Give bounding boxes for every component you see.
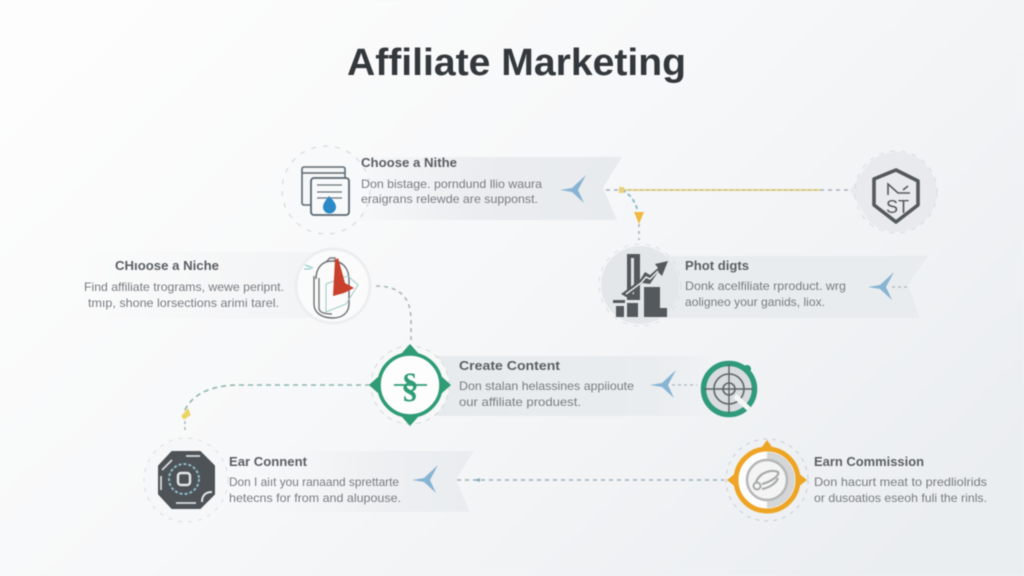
ribbon xyxy=(340,157,622,220)
panel: earn commission xyxy=(726,439,987,521)
arrow xyxy=(412,465,438,493)
panel: phot digts: aoligneo your ganids, liox. xyxy=(685,295,825,309)
icon: dark gear xyxy=(144,438,228,522)
panel: ear connent xyxy=(144,438,480,522)
heading: Earn Commission xyxy=(814,454,924,469)
icon: dollar compass: § xyxy=(401,366,419,405)
panel: create content: our affiliate produest. xyxy=(459,395,581,409)
panel: choose a niche left: tmıp, shone lorsections arimi tarel. xyxy=(88,296,279,310)
body: Don stalan helassines appiioute xyxy=(459,379,634,393)
heading: Create Content xyxy=(459,358,561,373)
heading: CHıoose a Niche xyxy=(115,258,219,273)
panel: choose a niche top: eraigrans relewde are supponst. xyxy=(361,192,538,206)
heading: Phot digts xyxy=(685,258,749,273)
panel: hexagon icon xyxy=(850,151,937,233)
panel: create content xyxy=(369,344,754,426)
connector: top dotted line to hexagon icon xyxy=(582,187,850,240)
panel: choose a niche left xyxy=(80,249,370,323)
connector: bottom line xyxy=(425,479,724,481)
heading: Choose a Nithe xyxy=(361,155,457,170)
ribbon xyxy=(420,356,712,416)
icon: orange compass xyxy=(726,439,808,521)
title: Affiliate Marketing xyxy=(347,42,686,84)
arrow xyxy=(650,370,676,398)
arrow xyxy=(560,175,586,203)
icon circle xyxy=(296,249,370,323)
ribbon xyxy=(640,256,928,318)
panel: earn commission: or dusoatios eseoh fuli the rinls. xyxy=(814,491,987,505)
panel: hexagon icon: ST xyxy=(886,197,909,217)
body: Don bistage. porndund llio waura xyxy=(361,177,542,191)
body: Don hacurt meat to predliolrids xyxy=(814,475,987,489)
heading: Ear Connent xyxy=(229,454,308,469)
icon circle xyxy=(601,246,679,324)
panel: ear connent: hetecns for from and alupouse. xyxy=(229,491,401,505)
connector: niche to dollar xyxy=(376,286,411,340)
panel: phot digts xyxy=(599,244,928,326)
panel: choose a niche top xyxy=(282,146,622,234)
icon: radar target xyxy=(704,364,754,414)
icon circle xyxy=(282,146,370,234)
body: Find affiliate trograms, wewe peripnt. xyxy=(84,280,284,294)
connector: dollar to bottom-left xyxy=(182,385,370,430)
icon: bar chart xyxy=(613,254,668,317)
body: Donk acelfiliate rproduct. wrg xyxy=(685,279,846,293)
body: Don I aiıt you ranaand sprettarte xyxy=(229,475,399,489)
icon: dollar compass xyxy=(369,344,451,426)
arrow xyxy=(868,272,894,300)
ribbon xyxy=(230,451,474,512)
